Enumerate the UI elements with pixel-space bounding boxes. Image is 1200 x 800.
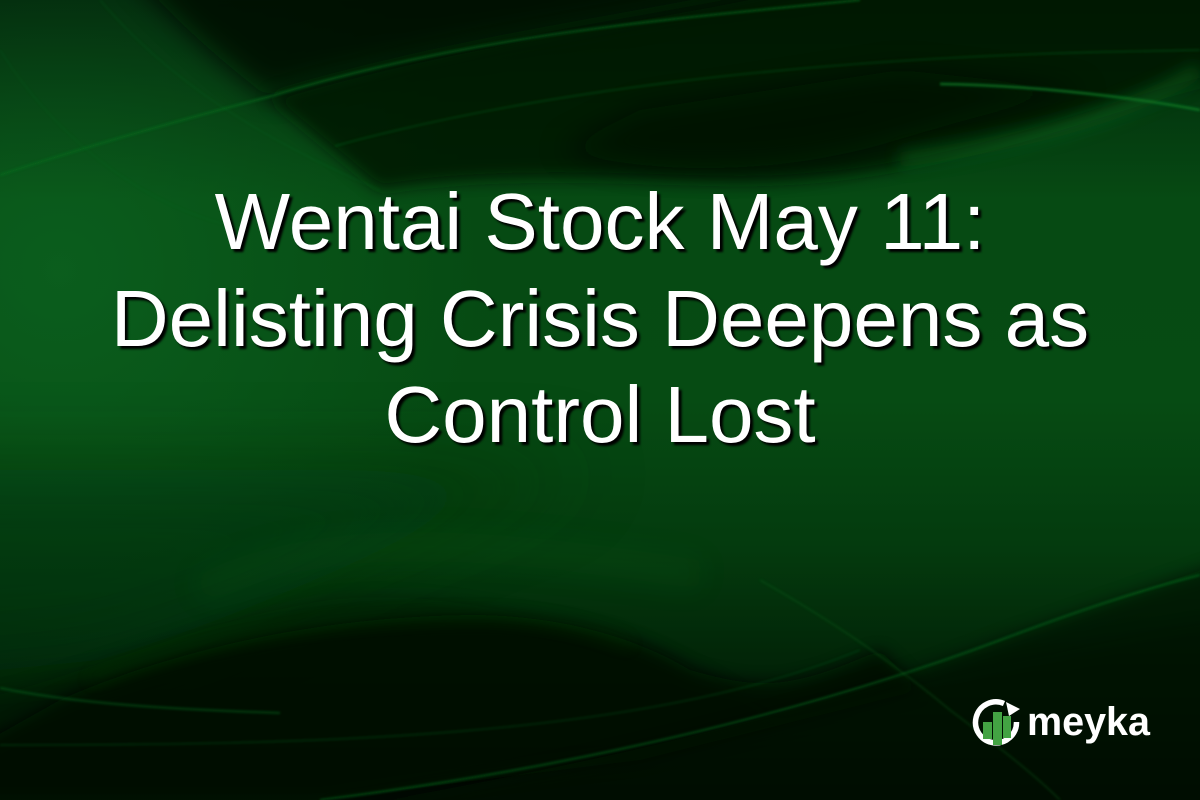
title: Wentai Stock May 11: [215, 177, 985, 266]
logo: meyka [972, 699, 1151, 746]
title: Delisting Crisis Deepens as [111, 274, 1089, 362]
title: Control Lost [384, 370, 816, 459]
title [111, 177, 1090, 459]
icon: circular arrow with bars [976, 702, 1020, 745]
wordmark: meyka [1027, 700, 1151, 744]
